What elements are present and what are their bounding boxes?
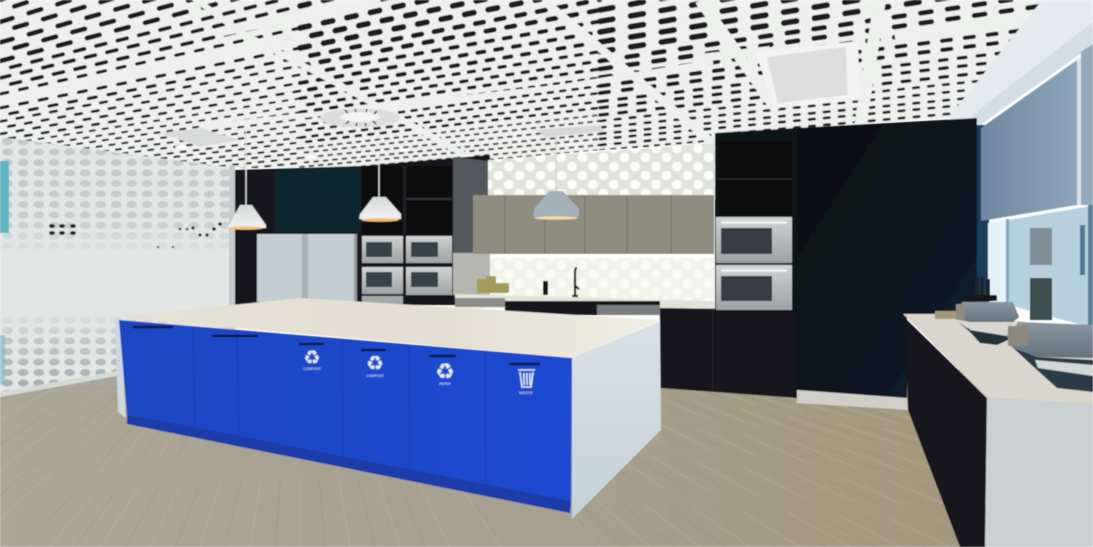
tap bbox=[572, 268, 579, 296]
recycling label compost two: ♻ bbox=[366, 351, 384, 375]
blue island bbox=[115, 298, 661, 519]
floor bbox=[0, 240, 1093, 547]
column shelves bbox=[719, 141, 792, 215]
jars on counter bbox=[477, 276, 509, 293]
right counter bbox=[903, 277, 1093, 547]
ceiling spotlights bbox=[175, 145, 409, 159]
fridge bbox=[257, 234, 357, 302]
frosted glass wall bbox=[0, 137, 235, 397]
ceiling panel centre bbox=[536, 125, 604, 137]
pendant lamp left bbox=[228, 132, 266, 230]
island worktop bbox=[115, 298, 660, 358]
island end panel bbox=[572, 321, 661, 519]
recycling label compost: COMPOST bbox=[303, 367, 322, 371]
stacked microwaves bbox=[362, 236, 453, 305]
wall returning to window bbox=[977, 125, 989, 320]
lower dark cabinets bbox=[660, 308, 797, 398]
back wall dark cabinetry bbox=[235, 155, 490, 305]
round ceiling diffuser bbox=[320, 108, 400, 128]
plates bbox=[935, 311, 957, 319]
ceiling perforation dots bbox=[0, 0, 1040, 169]
recycling label compost: ♻ bbox=[303, 347, 321, 369]
near appliance close bbox=[1008, 322, 1093, 392]
ceiling panel left bbox=[160, 128, 240, 147]
tall black column bbox=[715, 128, 797, 312]
knife block bbox=[965, 277, 997, 301]
waste bin icon and label bbox=[518, 370, 535, 395]
recycling label paper: ♻ bbox=[435, 360, 455, 385]
roller blinds bbox=[981, 44, 1093, 221]
hexagon tile wall bbox=[488, 143, 715, 205]
soap dispenser bbox=[543, 281, 548, 295]
open shelving bbox=[362, 166, 452, 234]
worktop bbox=[903, 314, 1093, 404]
lower wall oven bbox=[716, 265, 792, 310]
side panel bbox=[453, 157, 488, 253]
pendant lamp middle bbox=[359, 155, 401, 222]
dark glossy panel bbox=[275, 166, 361, 232]
large dark wall panel bbox=[797, 118, 977, 398]
dark base cabinets bbox=[905, 318, 987, 547]
pendant lamp right bbox=[533, 135, 579, 220]
door handles bbox=[134, 327, 539, 364]
near appliance far bbox=[956, 302, 1019, 345]
baseboard bbox=[797, 390, 908, 410]
recycling label compost two: COMPOST bbox=[366, 374, 385, 378]
plinth bbox=[127, 414, 571, 513]
pale left trim bbox=[115, 317, 126, 418]
recycling label paper: PAPER bbox=[439, 382, 451, 386]
back counter bbox=[455, 294, 714, 315]
ceiling bbox=[0, 0, 1093, 192]
square ceiling vent right bbox=[755, 41, 860, 108]
teal strip bbox=[0, 161, 9, 233]
door seams bbox=[193, 327, 486, 487]
window bbox=[988, 205, 1093, 328]
upper cupboards bbox=[473, 195, 714, 254]
upper wall oven bbox=[716, 217, 792, 263]
ceiling edge band bbox=[945, 0, 1093, 125]
blue cabinet front bbox=[119, 320, 572, 503]
lit splashback bbox=[490, 254, 714, 302]
dark dot clusters on glass bbox=[49, 222, 222, 248]
end panel bbox=[985, 398, 1093, 547]
waste bin icon and label: WASTE bbox=[519, 390, 533, 395]
